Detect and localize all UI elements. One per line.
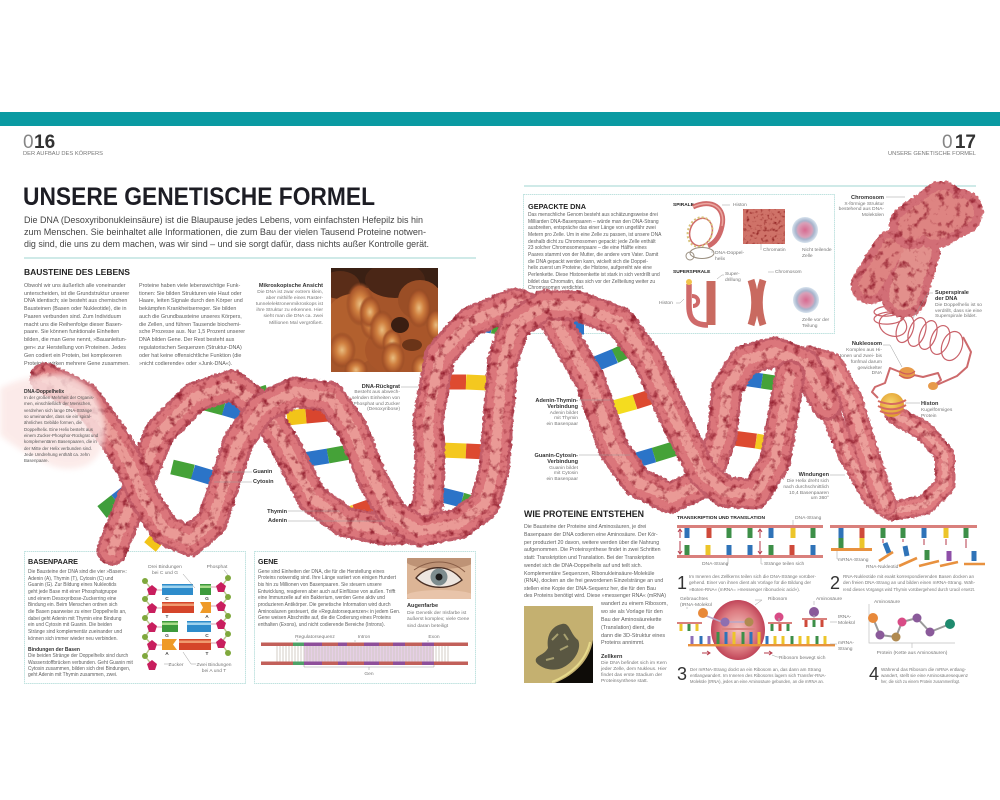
diagram: step 3 ribosome: Gebrauchtes [680,596,709,602]
diagram: step 3 ribosome [677,596,855,661]
callout: DNA-Doppelhelix: Jede Umdrehung enthält ca. zehn [24,452,90,457]
caption: Mikroskopische Ansicht: Millionen Mal vergrößert. [269,320,323,326]
callout: DNA-Doppelhelix: ähnliches Gebilde formen, die [24,420,82,425]
panel text: Adenin (A), Thymin (T), Cytosin (C) und [28,576,113,582]
step 1 text [677,573,816,593]
label: Guanin-Cytosin-Verbindung: Verbindung [547,459,579,465]
intro text: dig sind, die uns zu dem machen, was wir sind – und sie sorgt dafür, dass nichts außer Kontrolle gerät. [24,239,429,249]
text column 2: tionen: Sie bilden Strukturen wie Haut oder [139,291,242,297]
spiral diagram: Histon [733,202,747,208]
base pair diagram: Phosphat [207,564,228,570]
spiral diagram: helix [715,256,726,262]
panel text: dabei geht Adenin mit Thymin eine Bindung [28,616,122,622]
section heading: WIE PROTEINE ENTSTEHEN [524,509,644,519]
diagram: step 2 mRNA formation: mRNA-Strang [838,557,869,563]
label: Guanin-Cytosin-Verbindung: Guanin-Cytosin- [534,453,578,459]
label: Guanin / Cytosin: Cytosin [253,479,274,485]
left page number: 0 [23,132,34,153]
panel text: Metern pro Zelle. Um in eine Zelle zu passen, ist unsere DNA [528,232,662,238]
panel text: Bindung ein. Beim Menschen ordnen sich [28,602,118,608]
panel text: Guanin (G). Zur Bildung eines Nukleotids [28,582,117,588]
caption: Zellkern: jeder Zelle, dem Nukleus. Hier [600,666,667,672]
caption: Mikroskopische Ansicht: aber mithilfe eines Raster- [266,295,323,301]
panel text: Aminosäuren gesteuert, die »Regulatorsequenzen« in jedem Gen. [258,609,400,615]
panel text: deshalb dicht zu Chromosomen gepackt: jede Zelle enthält [528,239,656,245]
caption: Augenfarbe: Augenfarbe [407,603,438,609]
panel text: und einem Desoxyribose-Zuckerring eine [28,596,117,602]
text column 1: macht uns die Reihenfolge dieser Basen- [24,322,123,328]
text column 2: bekämpfen Krankheitserreger. Sie bilden [139,306,236,312]
gene diagram: Regulatorsequenz [295,634,335,640]
section text: (RNA), docken an die frei gewordenen Einzelstränge an und [524,578,663,584]
label: Adenin-Thymin-Verbindung: Adenin bildet [550,410,579,416]
text column 1: Obwohl wir uns äußerlich alle voneinander [24,283,126,289]
caption: Augenfarbe: sind daran beteiligt [407,623,449,629]
section text [524,524,666,599]
label: Histon: Histon [921,401,939,407]
text column 2: Haare, leiten Signale durch den Körper und [139,298,243,304]
caption: Mikroskopische Ansicht: ihre Struktur zu erkennen. Hier [256,307,323,313]
gene diagram: Gen [364,671,374,677]
supercoil diagram: Super- [725,271,740,277]
panel text: geht jede Base mit einer Phosphatgruppe [28,589,117,595]
label: Windungen [783,472,845,501]
step 4 text: wandert, stellt sie eine Aminosäuresequenz [881,673,968,679]
label: Chromosom [839,195,905,218]
base pair diagram: C [205,633,209,639]
base pair diagram: A [165,651,169,657]
supercoil diagram [659,269,802,325]
panel text [528,212,662,291]
callout: DNA-Doppelhelix: der Mitte der Helix verbunden sind. [24,446,92,451]
diagram: step 4 protein chain: Protein (Kette aus Aminosäuren) [877,650,948,656]
panel text: geht Adenin mit Thymin zusammen, zwei. [28,672,117,678]
label: Nukleosom: Nukleosom [852,341,882,347]
photo: cell nucleus [524,606,593,683]
panel: Basenpaare [24,552,246,684]
step 3 text: entlangwandert. Im Inneren des Ribosoms lagern sich Transfer-RNA- [690,673,826,679]
label: Guanin-Cytosin-Verbindung: Guanin bildet [549,465,579,471]
label: DNA-Rueckgrat: DNA-Rückgrat [362,384,400,390]
panel text: Die Bausteine der DNA sind die vier »Basen«: [28,569,127,575]
diagram: step 3 ribosome: tRNA- [838,614,852,620]
callout: DNA-Doppelhelix: komplementären Basenpaaren, die in [24,439,97,444]
label: Superspirale der DNA: Superspirale [935,290,969,296]
caption: Mikroskopische Ansicht: sieht man die DNA ca. zwei [263,313,323,319]
left page number: 16 [34,132,55,153]
panel text: bis hin zu Millionen von Basenpaaren. Sie steuern unsere [258,582,382,588]
label: Nukleosom [840,341,902,376]
transcription heading: DNA-Strang [795,515,822,521]
label: Chromosom: Chromosom [851,195,884,201]
diagram: step 2 mRNA formation [830,525,985,570]
text column 1: unterscheiden, ist die Grundstruktur unserer [24,291,129,297]
label: Chromosom: bestehend aus DNA- [839,206,884,212]
caption: Augenfarbe [407,603,470,629]
chromosome [870,204,960,295]
panel text: Chromosomen verdichtet. [528,285,584,291]
base pair diagram: bei A und T [202,668,226,674]
base pair rungs [102,312,882,547]
step 4 text: Während das Ribosom die mRNA entlang- [881,667,966,673]
section text: statt: Transkription und Translation. Bei der Transkription [524,555,655,561]
spiral diagram: SPIRALE [673,202,695,208]
step 2 text: den freien DNA-Strang an und bilden einen mRNA-Strang. Wäh- [843,580,975,586]
panel text: ein und Cytosin mit Guanin. Die beiden [28,622,112,628]
callout: DNA-Doppelhelix: DNA-Doppelhelix [24,389,64,395]
base pair diagram: A [205,614,209,620]
label: Guanin-Cytosin-Verbindung [534,453,630,482]
base pair diagram: Zucker [169,662,184,668]
panel text: können sich immer wieder neu verbinden. [28,636,118,642]
dividing cell: Zelle vor der [802,317,830,323]
section text: per produziert 20 davon, weitere werden über die Nahrung [524,540,659,546]
supercoil diagram: Histon [659,300,673,306]
section text: Die Bausteine der Proteine sind Aminosäuren, je drei [524,524,646,530]
panel text: Entwicklung, reagieren aber auch auf Einflüsse von außen. Trifft [258,589,396,595]
right page number [888,132,977,157]
base pair diagram: G [205,596,209,602]
label: DNA-Rueckgrat: Besteht aus abwech- [354,389,400,395]
label: DNA-Rueckgrat: Phosphat und Zucker [354,401,400,407]
histone [878,393,906,417]
label: Histon: Kugelförmiges [921,407,953,413]
callout: DNA-Doppelhelix: Basenpaare. [24,458,49,463]
label: Adenin-Thymin-Verbindung: Adenin-Thymin- [535,398,578,404]
photo: eye [407,558,471,599]
panel text: Cytosin zusammen, bilden sich drei Bindungen, [28,666,130,672]
caption: Zellkern: findet das erste Stadium der [601,672,663,678]
helix strands [45,303,945,550]
step 2 text: rend dieses Vorgangs wird Thymin vorübergehend durch Uracil ersetzt. [843,587,975,593]
section text: wendet sich die DNA-Doppelhelix auf und teilt sich. [524,563,642,569]
text column 2: die Zellen, und führen Tausende biochemi- [139,322,241,328]
left page number: DER AUFBAU DES KÖRPERS [23,150,103,157]
text column 2: DNA bilden Gene. Der Rest besteht aus [139,337,235,343]
base pair diagram: Zwei Bindungen [196,662,232,668]
panel text: 23 solcher Chromosomenpaare – die eine Hälfte eines [528,245,647,251]
panel text: Paares stammt von der Mutter, die andere vom Vater. Damit [528,252,659,258]
transcription heading: TRANSKRIPTION UND TRANSLATION [677,515,766,520]
panel text: produzieren Antikörper. Die genetische Information wird durch [258,602,391,608]
left page number [23,132,103,157]
label: Windungen: um 360° [811,495,829,501]
transcription heading [677,515,822,525]
panel heading: BASENPAARE [28,557,78,566]
label: Windungen: Die Helix dreht sich [787,478,829,484]
caption: Mikroskopische Ansicht: Die DNA ist zwar extrem klein, [257,289,323,295]
base pair diagram: C [165,596,169,602]
diagram: step 4 protein chain: Aminosäure [874,599,900,605]
non dividing cell [792,217,832,259]
label: Guanin / Cytosin: Guanin [253,469,273,475]
section text beside photo: Proteins annimmt. [601,640,644,646]
label: Guanin / Cytosin [214,469,274,485]
step 3 text [677,664,826,685]
panel text [258,569,400,628]
caption: Mikroskopische Ansicht [256,283,324,326]
step 1 text: gehend. Einer von ihnen dient als Vorlage für die Bildung der [689,580,811,586]
label: DNA-Rueckgrat [352,384,418,412]
label: Windungen: Windungen [799,472,830,478]
panel heading: GENE [258,557,278,566]
text column 1: Bausteinen (Basen oder Nukleotide), die in [24,306,126,312]
caption: Mikroskopische Ansicht: tunnelelektronenmikroskops ist [256,301,324,307]
label: Nukleosom: tonen und zwei- bis [840,353,883,359]
supercoil diagram: drillung [725,277,741,283]
callout: DNA-Doppelhelix: Doppelhelix. Eine Helix besteht aus [24,427,94,432]
panel text: Stränge sind komplementär zueinander und [28,629,122,635]
label: Thymin / Adenin: Thymin [267,509,288,515]
panel text: enthalten (Exons), und nicht codierende Bereiche (Introns). [258,622,385,628]
non dividing cell: Nicht teilende [802,247,832,253]
section text beside photo: wo sie als Vorlage für den [600,609,663,615]
section text: stellen eine Kopie der DNA-Sequenz her, die für den Bau [524,586,656,592]
non dividing cell: Zelle [802,253,813,259]
spiral diagram [673,202,747,262]
section text beside photo [600,601,668,646]
panel text: Milliarden DNA-Basenpaaren – würde man den DNA-Strang [528,219,659,225]
text column 1: paare. Sie können funktionale Einheiten [24,329,119,335]
teal header band [0,112,1000,126]
label: Adenin-Thymin-Verbindung: Verbindung [547,404,579,410]
step 2 text [830,573,975,593]
label: Nukleosom: DNA [872,370,883,376]
text column 1 [24,283,130,367]
label: Windungen: nach durchschnittlich [783,484,829,490]
section text: Komplementäre Sequenzen, Ribonukleinsäure-Moleküle [524,571,655,577]
panel text: Das menschliche Genom besteht aus schätzungsweise drei [528,212,658,218]
spiral diagram: DNA-Doppel- [715,250,744,256]
text column 1: Proteinen wirken mehrere Gene zusammen. [24,361,130,367]
section text: aufgenommen. Die Proteinsynthese findet in zwei Schritten [524,547,661,553]
panel text: die DNA gepackt werden kann, wickelt sich die Doppel- [528,259,648,265]
chromatin square [743,209,786,253]
base pair diagram: T [206,651,209,657]
label: Histon [905,401,953,419]
gene diagram: Exon [428,634,440,640]
panel heading: GEPACKTE DNA [528,202,586,211]
text column 1: Gen codiert ein Protein, bei komplexeren [24,353,122,359]
panel text: Gene weisen Abschnitte auf, die die Codierung eines Proteins [258,615,391,621]
caption: Zellkern: Zellkern [601,654,623,660]
step 4 text: her, die sich zu einem Protein zusammenfügt. [881,679,960,685]
step 2 text: 2 [830,573,840,593]
right page number: 0 [942,132,953,153]
intro text: Die DNA (Desoxyribonukleinsäure) ist die Blaupause jedes Lebens, vom einfachsten Hefepilz bis hin [24,215,423,225]
coiled thin DNA loops [874,305,967,364]
caption: Augenfarbe: Die Genetik der Irisfarbe ist [407,610,467,616]
diagram: step 1 strand separation: DNA-Strang [702,561,729,567]
faded overlay behind helix caption [0,374,105,469]
text column 2: »nicht codierende« oder »Junk-DNA«). [139,361,232,367]
diagram: step 3 ribosome: Aminosäure [816,596,842,602]
title: UNSERE GENETISCHE FORMEL [23,183,375,211]
diagram: step 2 mRNA formation: RNA-Nukleotid [866,564,899,570]
step 3 text: 3 [677,664,687,684]
label: Adenin-Thymin-Verbindung: ein Basenpaar [546,421,578,427]
label: Windungen: 10,4 Basenpaaren [789,490,829,496]
panel text: helix zuerst um Proteine, die Histone, aufgereiht wie eine [528,265,652,271]
step 1 text: »Boten-RNA« (mRNA= »messenger ribonucleic acid«). [689,587,800,593]
text column 2 [139,283,245,367]
diagram: step 1 strand separation: Stränge teilen sich [764,561,805,567]
label: DNA-Rueckgrat: (Desoxyribose) [367,406,400,412]
panel text: Bindungen der Basen [28,647,80,653]
text column 1: gen« zur Herstellung von Proteinen. Jedes [24,345,126,351]
text column 2: sche Prozesse aus. Nur 1,5 Prozent unserer [139,329,245,335]
step 4 text [869,664,968,685]
label: Thymin / Adenin: Adenin [268,518,288,524]
base pair diagram: T [166,614,169,620]
callout: DNA-Doppelhelix: In der großen Mehrheit der Organis- [24,395,95,400]
diagram: step 1 strand separation [677,525,823,567]
panel text [28,569,133,678]
panel text: Wasserstoffbrücken verbunden. Geht Guanin mit [28,660,133,666]
right page number: UNSERE GENETISCHE FORMEL [888,151,977,157]
section text beside photo: (Translation) dient, die [601,625,654,631]
diagram: step 3 ribosome: Molekül [838,620,855,626]
label: Chromosom: X-förmige Struktur [844,201,884,207]
caption: Zellkern [600,654,667,684]
section text beside photo: wandert zu einem Ribosom, [600,601,668,607]
intro text [24,215,429,249]
panel text: Perlenkette. Diese Histonenkette ist stark in sich verdrillt und [528,272,660,278]
supercoil diagram: Chromosom [775,269,802,275]
panel text: ausbreiten, entspräche das einer Länge von ungefähr zwei [528,225,656,231]
text column 1: DNA identisch; sie besteht aus chemischen [24,298,127,304]
step 1 text: 1 [677,573,687,593]
gene diagram: Intron [358,634,371,640]
panel text: Proteins notwendig sind. Ihre Länge variiert von einigen Hundert [258,575,397,581]
section text: Basenpaare der DNA codieren eine Aminosäure. Der Kör- [524,532,658,538]
label: Superspirale der DNA: Die Doppelhelix ist so [935,302,982,308]
callout: DNA-Doppelhelix: men, einschließlich der Menschen, [24,401,91,406]
thin DNA with nucleosomes [872,337,971,398]
panel text: Gene sind Einheiten der DNA, die für die Herstellung eines [258,569,385,575]
text column 1: bilden, die man Gene nennt, »Bauanleitun- [24,337,127,343]
label: Nukleosom: gewickelter [858,365,882,371]
text column 2: regulatorischen Sequenzen (Struktur-DNA) [139,345,242,351]
step 4 text: 4 [869,664,879,684]
step 3 text: Moleküle (tRNA), jedes an eine Aminosäure gebunden, an die mRNA an. [690,679,824,685]
gene diagram [261,634,468,677]
panel: Gene [254,552,476,684]
callout: DNA-Doppelhelix: einem Zucker-Phosphor-Rückgrat und [24,433,99,438]
label: Adenin-Thymin-Verbindung [535,398,610,427]
diagram: step 3 ribosome: Strang [838,646,853,652]
divider rules [24,258,476,259]
dividing cell: Teilung [802,323,818,329]
base pair diagram: Drei Bindungen [148,564,182,570]
label: Superspirale der DNA: verdrillt, dass sie eine [935,308,982,314]
step 2 text: RNA-Nukleotide mit exakt korrespondierenden Basen docken an [843,574,974,580]
label: Thymin / Adenin [267,509,385,524]
step 3 text: Der mRNA-Strang dockt an ein Ribosom an, das dann am Strang [690,667,821,673]
dividing cell [793,287,830,329]
text column 2: oder hat keine offensichtliche Funktion (die [139,353,241,359]
label: Nukleosom: Komplex aus Hi- [846,347,882,353]
step 1 text: Im Inneren des Zellkerns teilen sich die DNA-Stränge vorüber- [689,574,816,580]
panel text: eine Immunzelle auf ein Bakterium, werden Gene aktiv und [258,595,385,601]
text column 2: Proteine haben viele lebenswichtige Funk- [139,283,240,289]
caption: Zellkern: Proteinsynthese statt. [601,678,648,684]
section text beside photo: dann die 3D-Struktur eines [601,633,665,639]
callout: DNA-Doppelhelix [24,389,99,463]
label: Superspirale der DNA: Superspirale bildet. [935,313,977,319]
label: Histon: Protein [921,413,937,419]
panel text: Die beiden Stränge der Doppelhelix sind durch [28,653,128,659]
heading: Bausteine des Lebens: BAUSTEINE DES LEBENS [24,267,130,277]
callout: DNA-Doppelhelix: so umeinander, dass sie ein spiral- [24,414,92,419]
caption: Augenfarbe: äußerst komplex; viele Gene [407,616,470,622]
panel: Gepackte DNA [524,194,834,334]
panel text: die Basen paarweise zu einer Doppelhelix an, [28,609,126,615]
chromatin square: Chromatin [763,247,786,253]
section text beside photo: Bau der Aminosäurekette [601,617,662,623]
supercoil diagram: SUPERSPIRALE [673,269,711,275]
right page number: 17 [955,132,976,153]
DNA double helix illustration [45,303,945,550]
caption: Mikroskopische Ansicht: Mikroskopische Ansicht [259,283,323,289]
diagram: step 4 protein chain [868,599,955,656]
label: Chromosom: Molekülen [862,212,884,218]
base pair diagram: bei C und G [152,570,178,576]
label: Guanin-Cytosin-Verbindung: ein Basenpaar [546,476,578,482]
label: Nukleosom: fünfmal darum [851,359,882,365]
label: Superspirale der DNA [913,290,982,319]
intro text: zum Menschen. Sie beinhaltet alle Informationen, die zum Bau der vielen Tausend Proteine notwen- [24,227,426,237]
callout: DNA-Doppelhelix: verdrehen sich lange DNA-Stränge [24,408,92,413]
base pair diagram [142,564,232,674]
text column 1: Paaren verbunden sind. Zum Individuum [24,314,122,320]
photo: microscopic DNA terrain [331,268,438,372]
label: Superspirale der DNA: der DNA [935,296,957,302]
diagram: step 3 ribosome: mRNA- [838,640,854,646]
diagram: step 3 ribosome: Ribosom bewegt sich [779,655,826,661]
section: Wie Proteine entstehen [524,509,668,684]
diagram: step 3 ribosome: (tRNA-Molekül [680,602,712,608]
caption: Zellkern: Die DNA befindet sich im Kern [601,660,667,666]
base pair diagram: G [165,633,169,639]
panel text: bildet das Chromatin, das sich vor der Zellteilung weiter zu [528,279,655,285]
section text: des Proteins benötigt wird. Diese »messenger RNA« (mRNA) [524,593,666,599]
text column 2: auch die Grundbausteine unseres Körpers, [139,314,242,320]
label: Adenin-Thymin-Verbindung: mit Thymin [554,415,578,421]
label: DNA-Rueckgrat: selnden Einheiten von [352,395,400,401]
diagram: step 3 ribosome: Ribosom [768,596,787,602]
label: Guanin-Cytosin-Verbindung: mit Cytosin [554,470,578,476]
